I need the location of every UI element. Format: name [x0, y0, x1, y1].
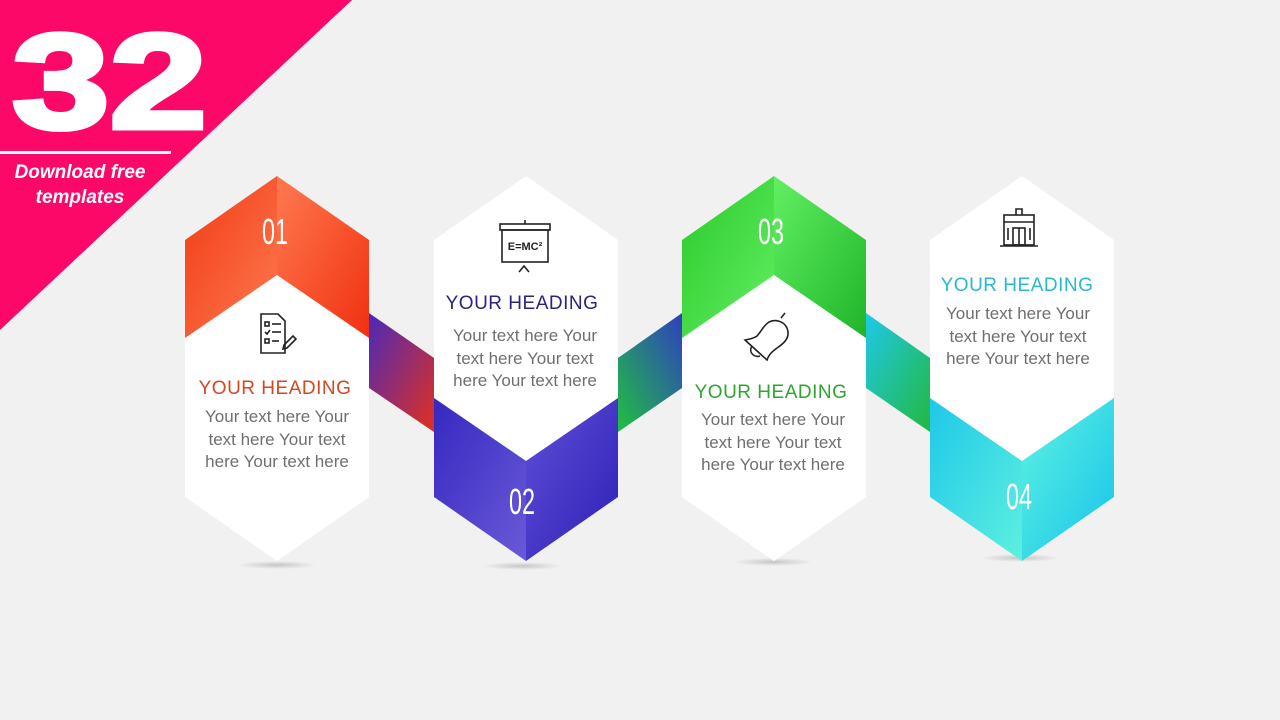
corner banner: Download free [15, 162, 146, 183]
panel 2: here Your text here [453, 371, 597, 390]
panel 3: here Your text here [701, 455, 845, 474]
panel 3: YOUR HEADING [695, 382, 847, 403]
panel 4: 04 [1006, 478, 1032, 517]
panel 3: Your text here Your [701, 410, 845, 429]
panel 4 [930, 176, 1114, 561]
icon: board [500, 220, 550, 272]
icon: building [1000, 209, 1038, 246]
corner banner: templates [36, 187, 124, 208]
corner banner: 32 [12, 6, 207, 157]
panel 1: YOUR HEADING [199, 378, 351, 399]
panel 2: Your text here Your [453, 326, 597, 345]
panel 1: 01 [262, 213, 288, 252]
shadows [237, 554, 1060, 570]
ribbon 3-4 [866, 313, 930, 432]
panel 1: text here Your text [208, 430, 346, 449]
panel 3: 03 [758, 213, 784, 252]
panel 4: Your text here Your [946, 304, 1090, 323]
ribbon 2-3 [618, 313, 682, 432]
panel 4: YOUR HEADING [941, 275, 1093, 296]
icon: checklist [261, 314, 296, 353]
panel 4: text here Your text [949, 327, 1087, 346]
panel 2: YOUR HEADING [446, 293, 598, 314]
panel 2: 02 [509, 483, 535, 522]
icon: bell [745, 313, 788, 360]
panel 4: here Your text here [946, 349, 1090, 368]
panel 3: text here Your text [704, 433, 842, 452]
panel 2 [434, 176, 618, 561]
panel 2: text here Your text [456, 349, 594, 368]
panel 1: Your text here Your [205, 407, 349, 426]
icon: board: E=MC² [508, 241, 543, 253]
panel 3 [682, 176, 866, 561]
panel 1 [185, 176, 369, 561]
corner banner [0, 0, 352, 330]
ribbon 1-2 [369, 313, 434, 432]
panel 1: here Your text here [205, 452, 349, 471]
